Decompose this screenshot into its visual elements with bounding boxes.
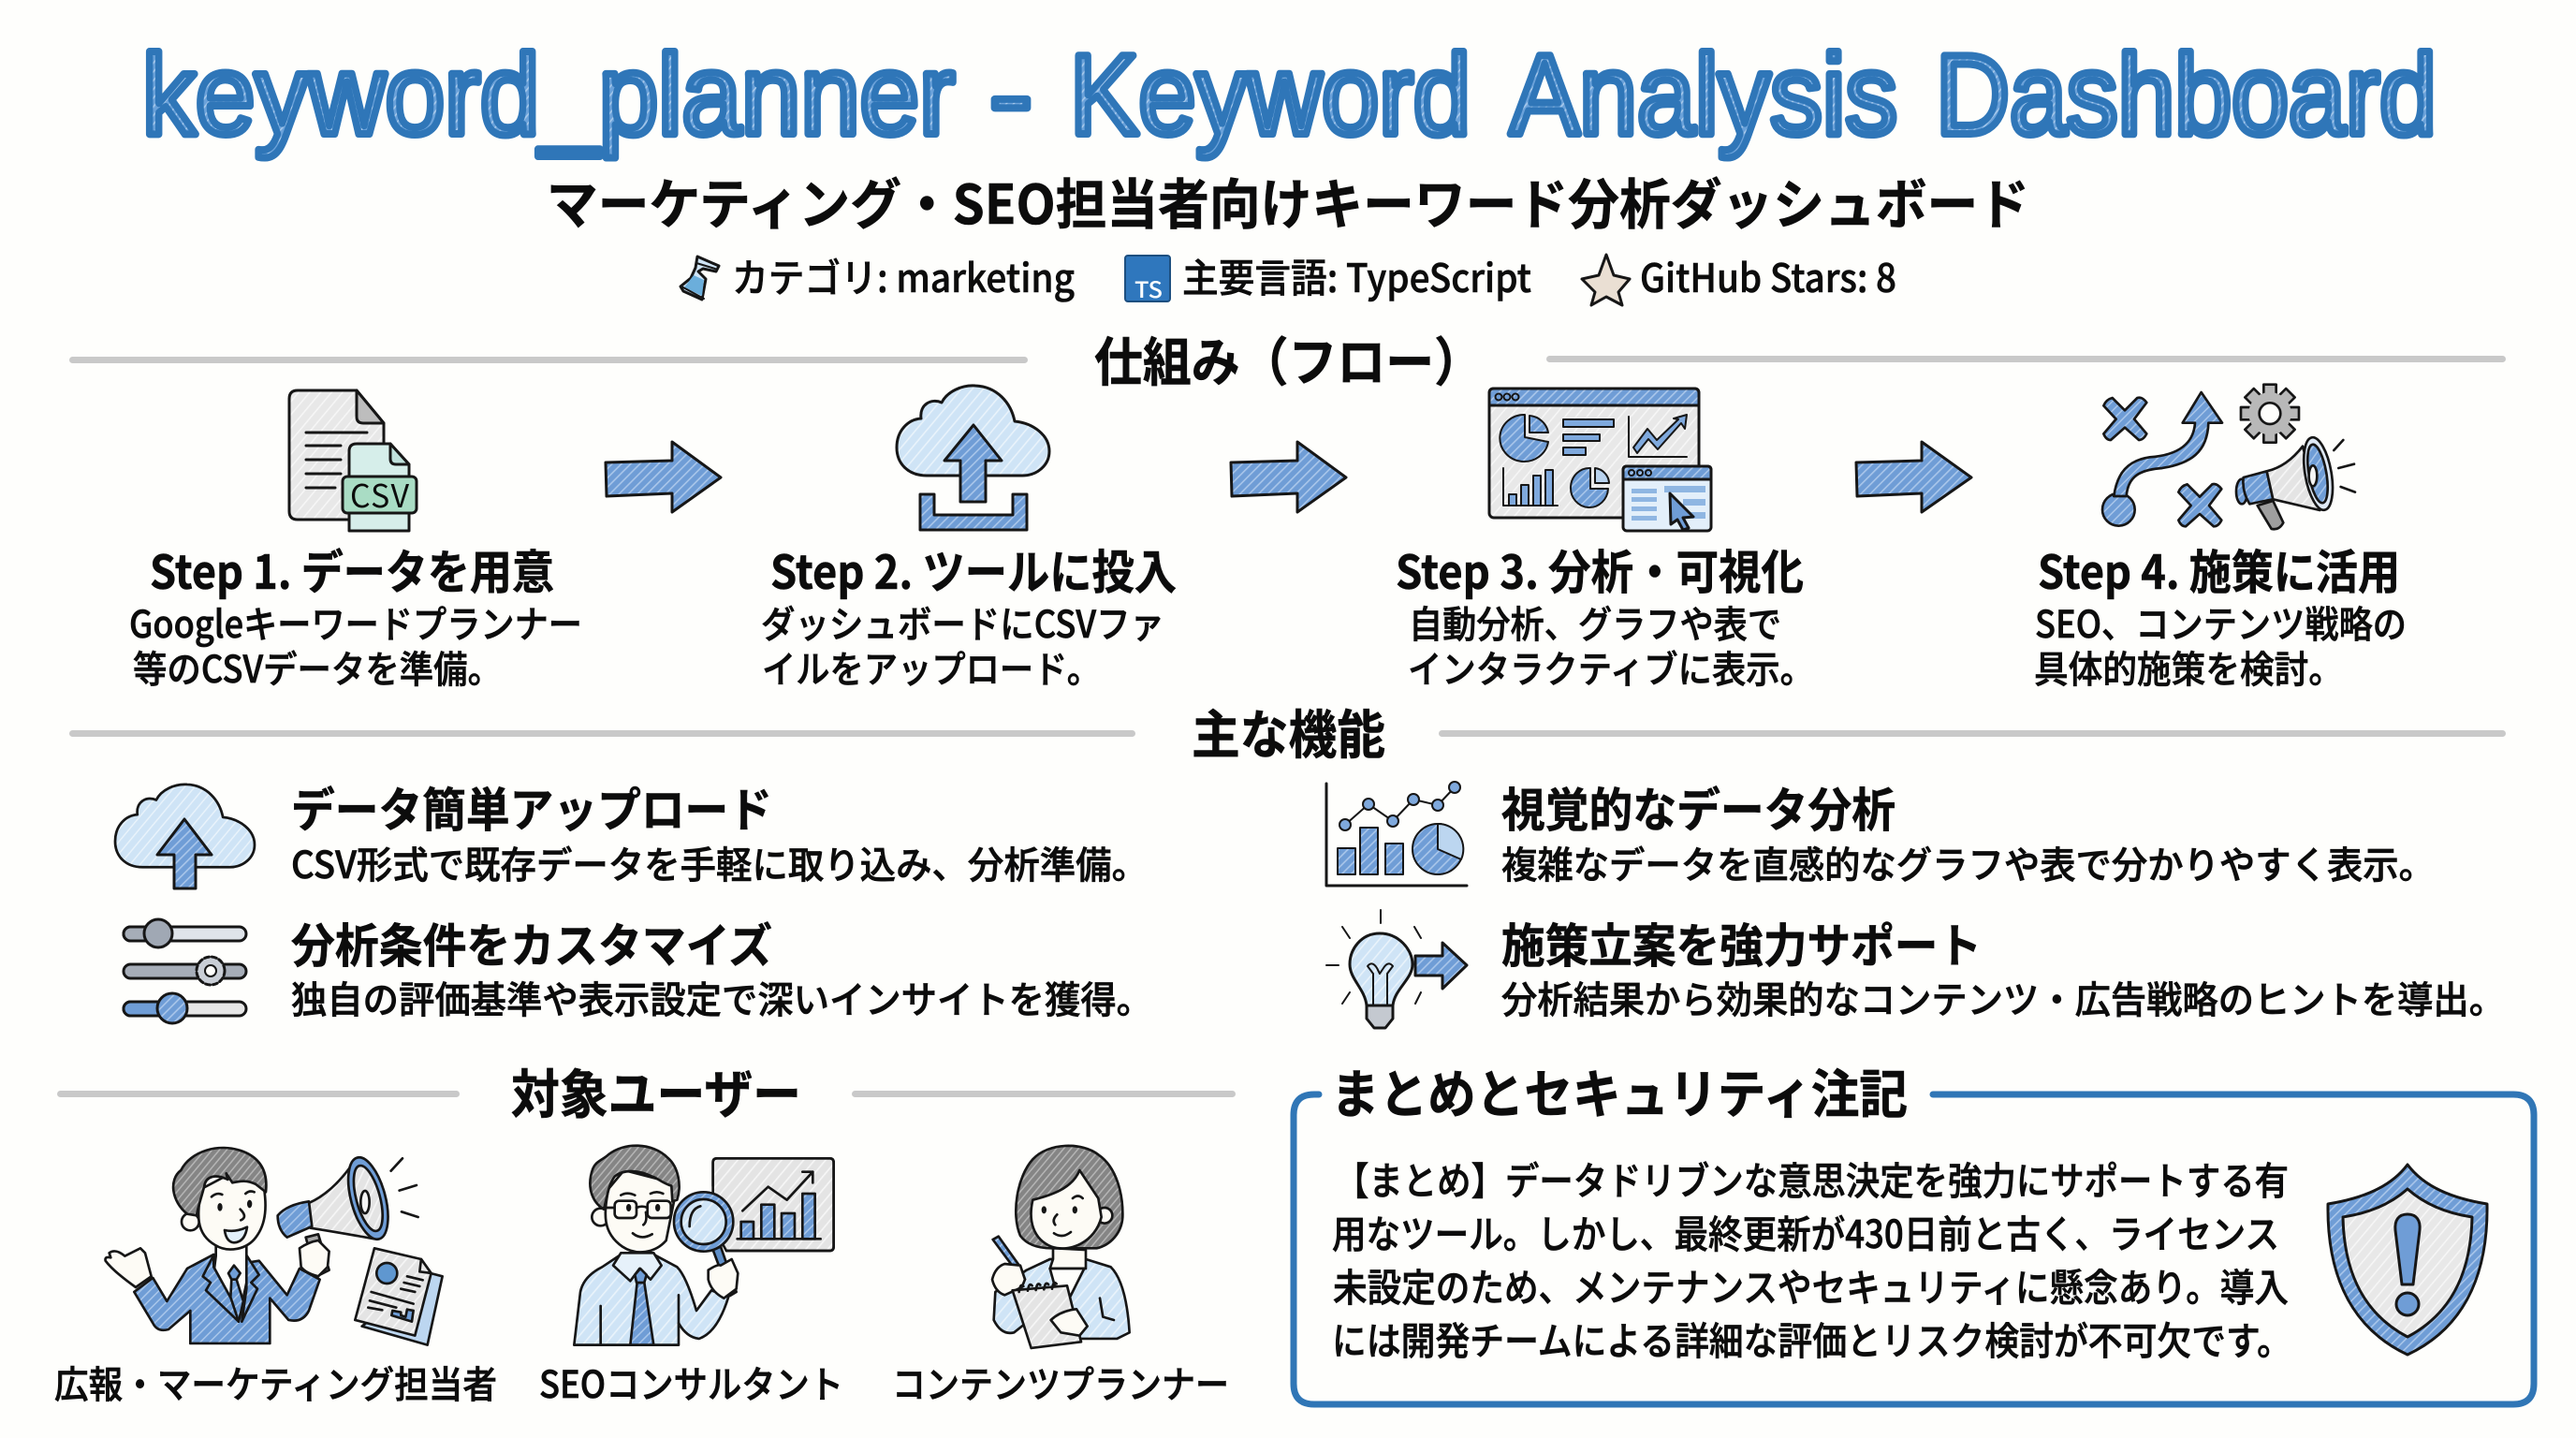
icon: warning shield — [2328, 1165, 2487, 1355]
illustration: planner with notepad — [992, 1146, 1130, 1348]
icon: star — [1582, 255, 1630, 305]
user label: コンテンツプランナー — [892, 1355, 1229, 1409]
title: - — [989, 31, 1032, 158]
panel body text: 【まとめ】データドリブンな意思決定を強力にサポートする有 — [1335, 1150, 2289, 1206]
arrow 1 — [606, 442, 721, 512]
user: content planner — [892, 1146, 1229, 1409]
step 4 description: SEO、コンテンツ戦略の — [2035, 594, 2407, 649]
title: Analysis — [1510, 31, 1897, 158]
illustration: consultant with magnifier — [574, 1146, 834, 1345]
feature description: 複雑なデータを直感的なグラフや表で分かりやすく表示。 — [1501, 835, 2435, 889]
heading: flow: 仕組み（フロー） — [1094, 321, 1483, 397]
icon: TypeScript badge: TS — [1134, 271, 1163, 304]
heading: target users: 対象ユーザー — [511, 1053, 801, 1129]
step 1 description: 等のCSVデータを準備。 — [133, 639, 502, 694]
feature heading: 分析条件をカスタマイズ — [291, 909, 772, 976]
title: Keyword — [1070, 31, 1471, 158]
icon: strategy and megaphone — [2102, 385, 2355, 529]
title — [142, 31, 2437, 158]
user label: 広報・マーケティング担当者 — [54, 1355, 497, 1409]
step 4 description: 具体的施策を検討。 — [2034, 639, 2343, 694]
meta row — [681, 247, 1896, 305]
feature description: 独自の評価基準や表示設定で深いインサイトを獲得。 — [291, 970, 1152, 1024]
feature: upload — [115, 773, 1148, 889]
panel body text: 未設定のため、メンテナンスやセキュリティに懸念あり。導入 — [1333, 1256, 2289, 1313]
illustration: man with megaphone — [106, 1148, 443, 1345]
icon: cloud upload — [897, 386, 1049, 530]
language label: 主要言語: TypeScript — [1182, 247, 1531, 304]
step 3 description: 自動分析、グラフや表で — [1409, 594, 1781, 649]
icon: CSV document: CSV — [350, 471, 409, 517]
feature heading: 施策立案を強力サポート — [1501, 909, 1982, 976]
icon: TypeScript badge — [1125, 256, 1170, 304]
step 4 heading: Step 4. 施策に活用 — [2038, 536, 2400, 603]
step 2 description: ダッシュボードにCSVファ — [761, 594, 1164, 649]
icon: sliders — [124, 919, 246, 1023]
arrow 2 — [1231, 442, 1346, 512]
feature heading: データ簡単アップロード — [291, 773, 772, 841]
step 2 description: イルをアップロード。 — [762, 639, 1101, 694]
step 3 description — [1408, 594, 1814, 694]
feature: visual analysis — [1326, 773, 2435, 889]
panel border — [1294, 1094, 2534, 1404]
panel: summary and security note — [1294, 1053, 2534, 1404]
step 2 heading: Step 2. ツールに投入 — [770, 536, 1177, 603]
icon: analytics dashboard — [1489, 389, 1711, 531]
step 3 heading: Step 3. 分析・可視化 — [1396, 536, 1804, 603]
heading: features: 主な機能 — [1192, 694, 1385, 770]
icon: category — [681, 257, 719, 300]
step 2 description — [761, 594, 1164, 694]
step 4 description — [2034, 594, 2407, 694]
step 3 — [1396, 389, 1814, 694]
step 2 — [761, 386, 1177, 694]
user label: SEOコンサルタント — [539, 1355, 843, 1409]
step 1 heading: Step 1. データを用意 — [150, 536, 554, 603]
step 1 description — [129, 594, 582, 694]
feature description: CSV形式で既存データを手軽に取り込み、分析準備。 — [291, 835, 1148, 889]
icon: CSV document — [289, 390, 417, 531]
feature description: 分析結果から効果的なコンテンツ・広告戦略のヒントを導出。 — [1501, 970, 2505, 1024]
step 1 description: Googleキーワードプランナー — [129, 594, 582, 649]
GitHub stars label: GitHub Stars: 8 — [1640, 247, 1896, 304]
step 1 — [129, 390, 582, 694]
panel heading: まとめとセキュリティ注記 — [1331, 1053, 1908, 1129]
step 4 — [2034, 385, 2407, 694]
panel body text: 用なツール。しかし、最終更新が430日前と古く、ライセンス — [1332, 1203, 2279, 1259]
user: PR and marketing — [54, 1148, 497, 1409]
arrow 3 — [1856, 442, 1971, 512]
icon: charts — [1326, 782, 1467, 886]
step 3 description: インタラクティブに表示。 — [1408, 639, 1814, 694]
panel body text — [1332, 1150, 2291, 1366]
feature heading: 視覚的なデータ分析 — [1501, 773, 1895, 841]
subtitle: マーケティング・SEO担当者向けキーワード分析ダッシュボード — [547, 161, 2029, 240]
user: SEO consultant — [539, 1146, 843, 1409]
feature: customize — [124, 909, 1152, 1024]
icon: light bulb — [1326, 910, 1467, 1028]
title: keyword_planner — [142, 31, 955, 158]
feature: planning support — [1326, 909, 2505, 1028]
icon: cloud upload — [115, 785, 255, 888]
panel body text: には開発チームによる詳細な評価とリスク検討が不可欠です。 — [1332, 1310, 2291, 1366]
title: Dashboard — [1936, 31, 2437, 158]
category label: カテゴリ: marketing — [732, 247, 1075, 304]
